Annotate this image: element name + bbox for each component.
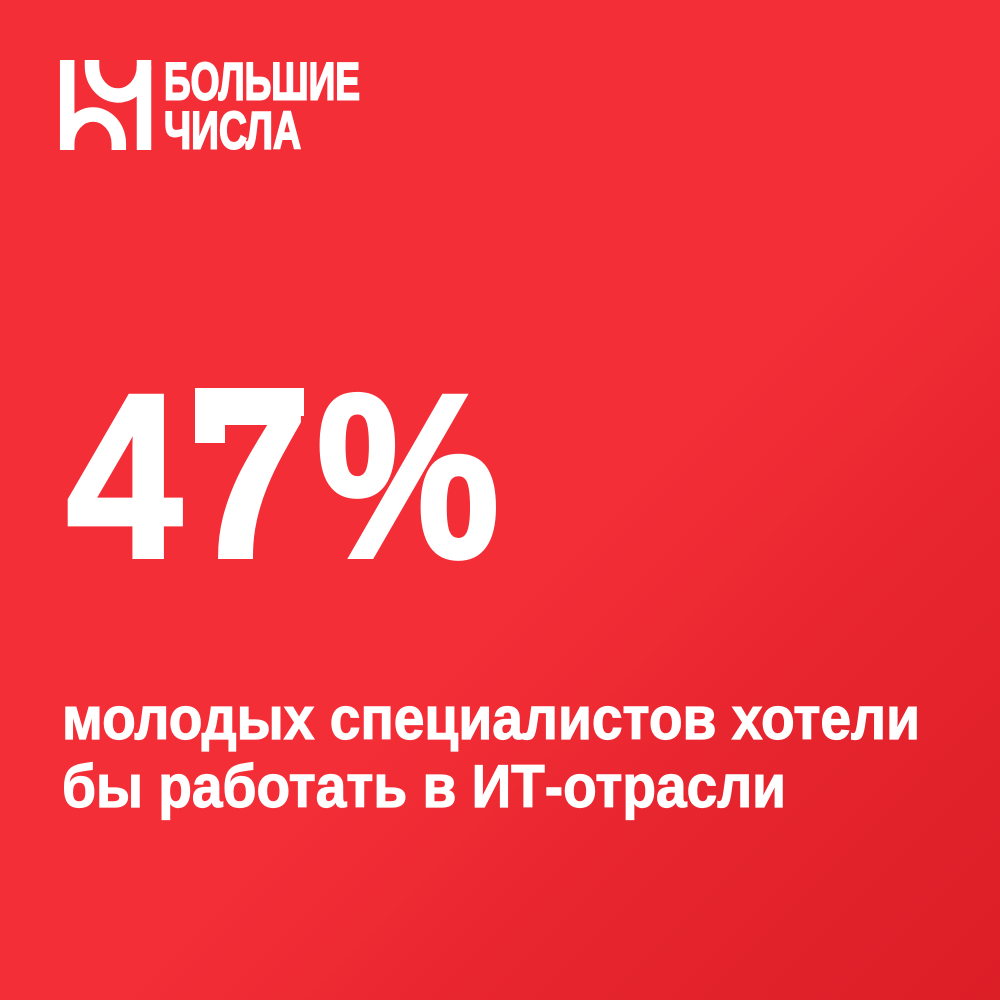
big number 47%: 7 bbox=[190, 346, 308, 606]
big number 47%: 4 bbox=[67, 346, 182, 606]
logo bbox=[67, 52, 360, 160]
logo wordmark bbox=[164, 52, 360, 160]
description text: бы работать в ИТ-отрасли bbox=[62, 753, 786, 820]
big number 47%: % bbox=[317, 346, 499, 606]
big number 47% bbox=[67, 346, 499, 606]
description text bbox=[62, 685, 920, 820]
logo wordmark: ЧИСЛА bbox=[164, 102, 301, 160]
icon: logo mark bbox=[67, 60, 144, 150]
description text: молодых специалистов хотели bbox=[62, 685, 920, 752]
logo wordmark: БОЛЬШИЕ bbox=[164, 52, 360, 112]
